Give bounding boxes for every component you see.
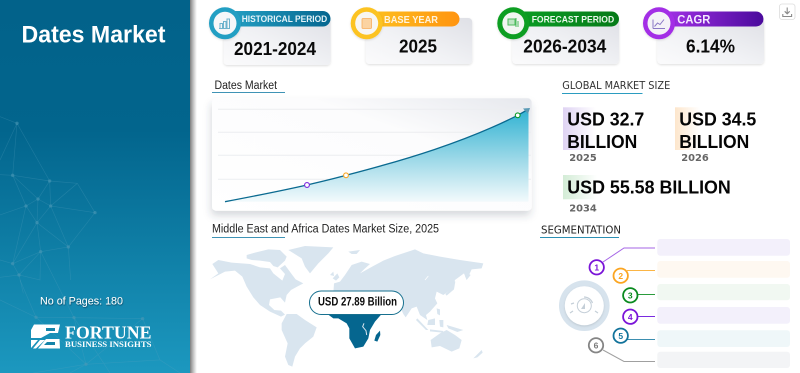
logo: Fortune Business Insights: FORTUNE [65,322,152,342]
metric: USD 34.5 billion 2026: BILLION [679,132,749,152]
badge 2: 2 [618,271,623,281]
icon: download button [780,4,795,20]
stat card: base year [351,7,472,64]
badge 6: 6 [594,340,599,350]
stat card: CAGR: 6.14% [686,37,735,57]
stat card: base year: 2025 [399,37,437,57]
badge 6 [589,338,603,352]
chart area fill [225,109,528,202]
metric: USD 32.7 billion 2025 [563,107,644,164]
trend arrow head [523,108,530,114]
icon: growth chart [653,20,665,28]
badge 3: 3 [628,290,633,300]
metric: USD 55.58 billion 2034: 2034 [569,204,597,215]
metric: USD 34.5 billion 2026 [675,107,756,164]
area chart: market growth [212,98,532,211]
callout: USD 27.89 Billion: USD 27.89 Billion [318,296,397,308]
heading: Dates Market chart: Dates Market [214,80,278,92]
data point 2026 [344,173,348,178]
title: Dates Market [22,22,166,48]
metric: USD 55.58 billion 2034: USD 55.58 BILLION [567,178,731,198]
callout: USD 27.89 Billion [310,291,404,314]
eastern hemisphere [327,249,483,358]
icon: forecast screen [508,18,518,27]
stat card: forecast period: 2026-2034 [523,37,606,57]
highlighted Africa region [327,314,382,348]
badge 2 [614,268,628,283]
logo: Fortune Business Insights: BUSINESS INSIGHTS [65,339,152,349]
panel: left sidebar [0,0,197,373]
stat card: historical period [209,7,330,65]
badge 4: 4 [628,312,633,322]
metric: USD 34.5 billion 2026: USD 34.5 [679,110,756,130]
stat card: CAGR: CAGR [677,12,711,26]
metric: USD 55.58 billion 2034 [563,175,731,215]
badge 1 [590,260,604,274]
network pattern [0,117,180,373]
central hub icon [559,280,610,331]
stat card: historical period: 2021-2024 [234,39,316,59]
Madagascar [374,331,380,342]
logo: Fortune Business Insights [31,322,152,349]
metric: USD 34.5 billion 2026: 2026 [681,153,709,164]
data point 2034 [515,113,520,118]
connector lines [603,248,655,362]
western hemisphere [210,246,333,367]
icon: bars [219,19,230,28]
stat card: base year: BASE YEAR [384,15,439,26]
stat card: CAGR [643,7,764,64]
lake detail [363,323,367,335]
stat card: forecast period [497,7,619,64]
heading: regional map: Middle East and Africa Dates Market Size, 2025 [212,224,439,236]
metric: USD 32.7 billion 2025: BILLION [567,132,637,152]
badge 5: 5 [618,331,623,341]
badge 5 [614,328,628,343]
stat card: forecast period: FORECAST PERIOD [532,14,615,24]
badge 3 [623,288,638,302]
metric: USD 32.7 billion 2025: 2025 [569,153,597,164]
heading: segmentation: SEGMENTATION [541,224,621,236]
badge 4 [623,310,638,324]
segmentation diagram [559,239,790,368]
world map [210,246,483,367]
icon: FB logo mark [31,324,60,348]
badge 1: 1 [594,262,599,272]
metric: USD 32.7 billion 2025: USD 32.7 [567,110,644,130]
segment bars [657,239,790,368]
heading: global market size: GLOBAL MARKET SIZE [562,80,670,92]
pages count: No of Pages: 180 [40,296,123,308]
stat card: historical period: HISTORICAL PERIOD [242,14,328,24]
data point 2025 [305,183,309,187]
icon: calendar [362,18,372,28]
trend line [225,110,528,202]
